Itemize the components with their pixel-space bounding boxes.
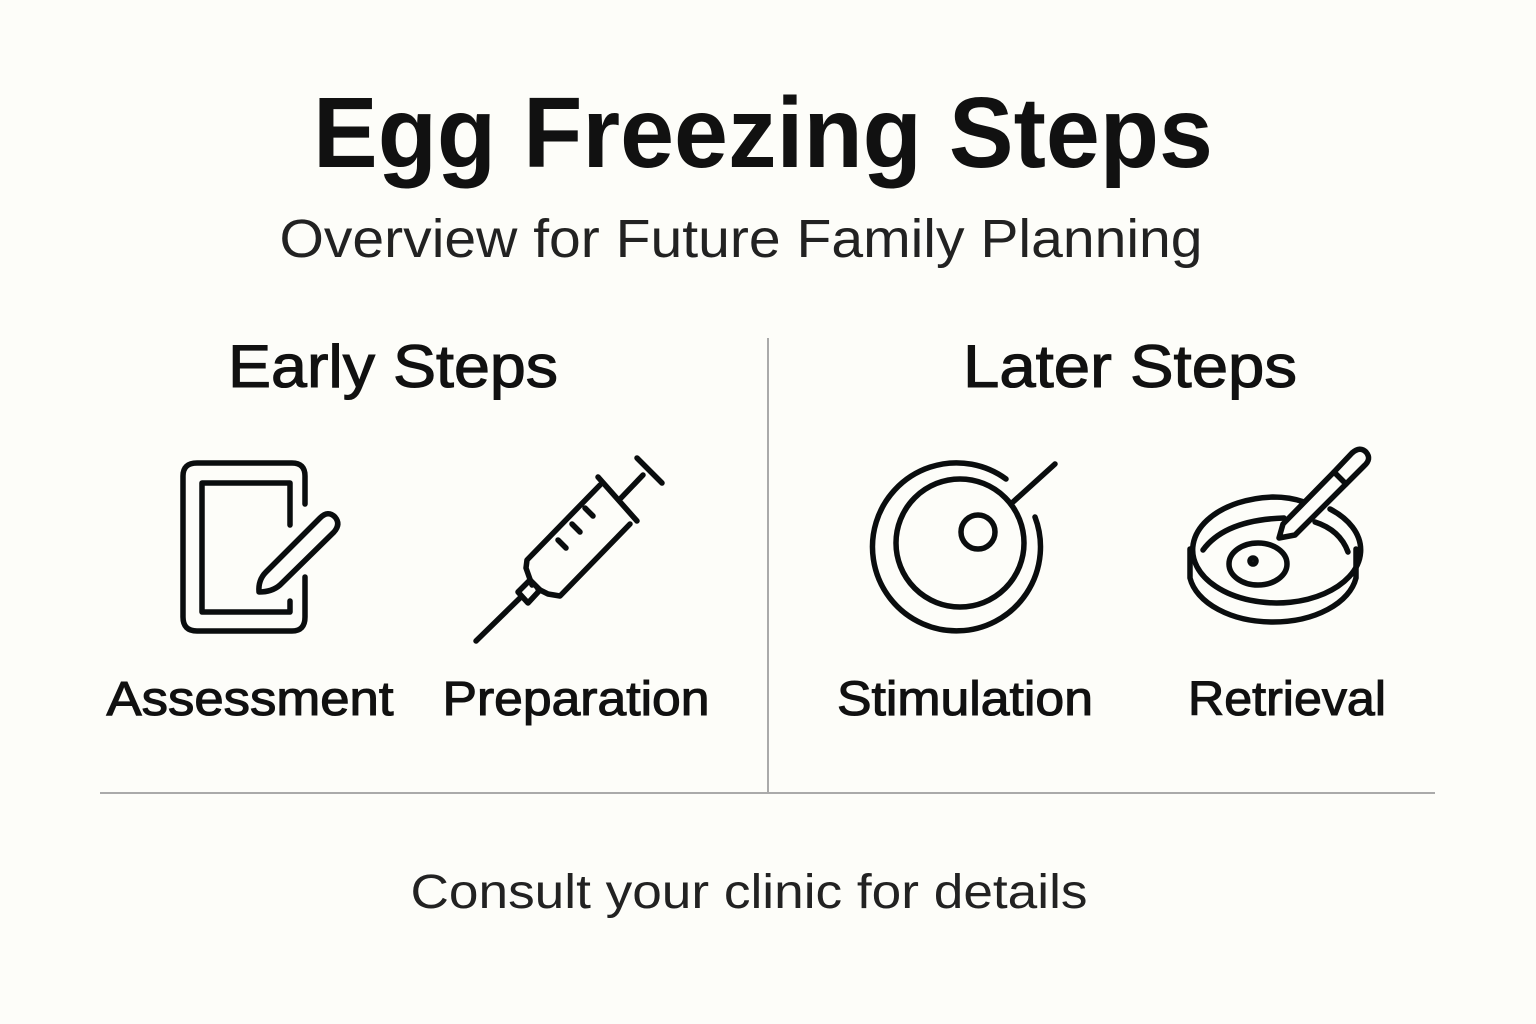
label: preparation: Preparation (442, 673, 710, 726)
heading: early steps: Early Steps (228, 333, 558, 400)
subtitle: Overview for Future Family Planning (280, 209, 1202, 269)
heading: later steps: Later Steps (963, 333, 1297, 400)
icon: syringe (476, 458, 662, 641)
title: Egg Freezing Steps (313, 77, 1213, 189)
icon: petri dish with dropper (1190, 449, 1369, 622)
label: retrieval: Retrieval (1188, 673, 1386, 726)
label: stimulation: Stimulation (837, 673, 1093, 726)
footer note: Consult your clinic for details (410, 866, 1088, 919)
icon: egg cell (872, 463, 1055, 631)
icon: tablet with pen (183, 463, 338, 631)
label: assessment: Assessment (106, 673, 394, 726)
